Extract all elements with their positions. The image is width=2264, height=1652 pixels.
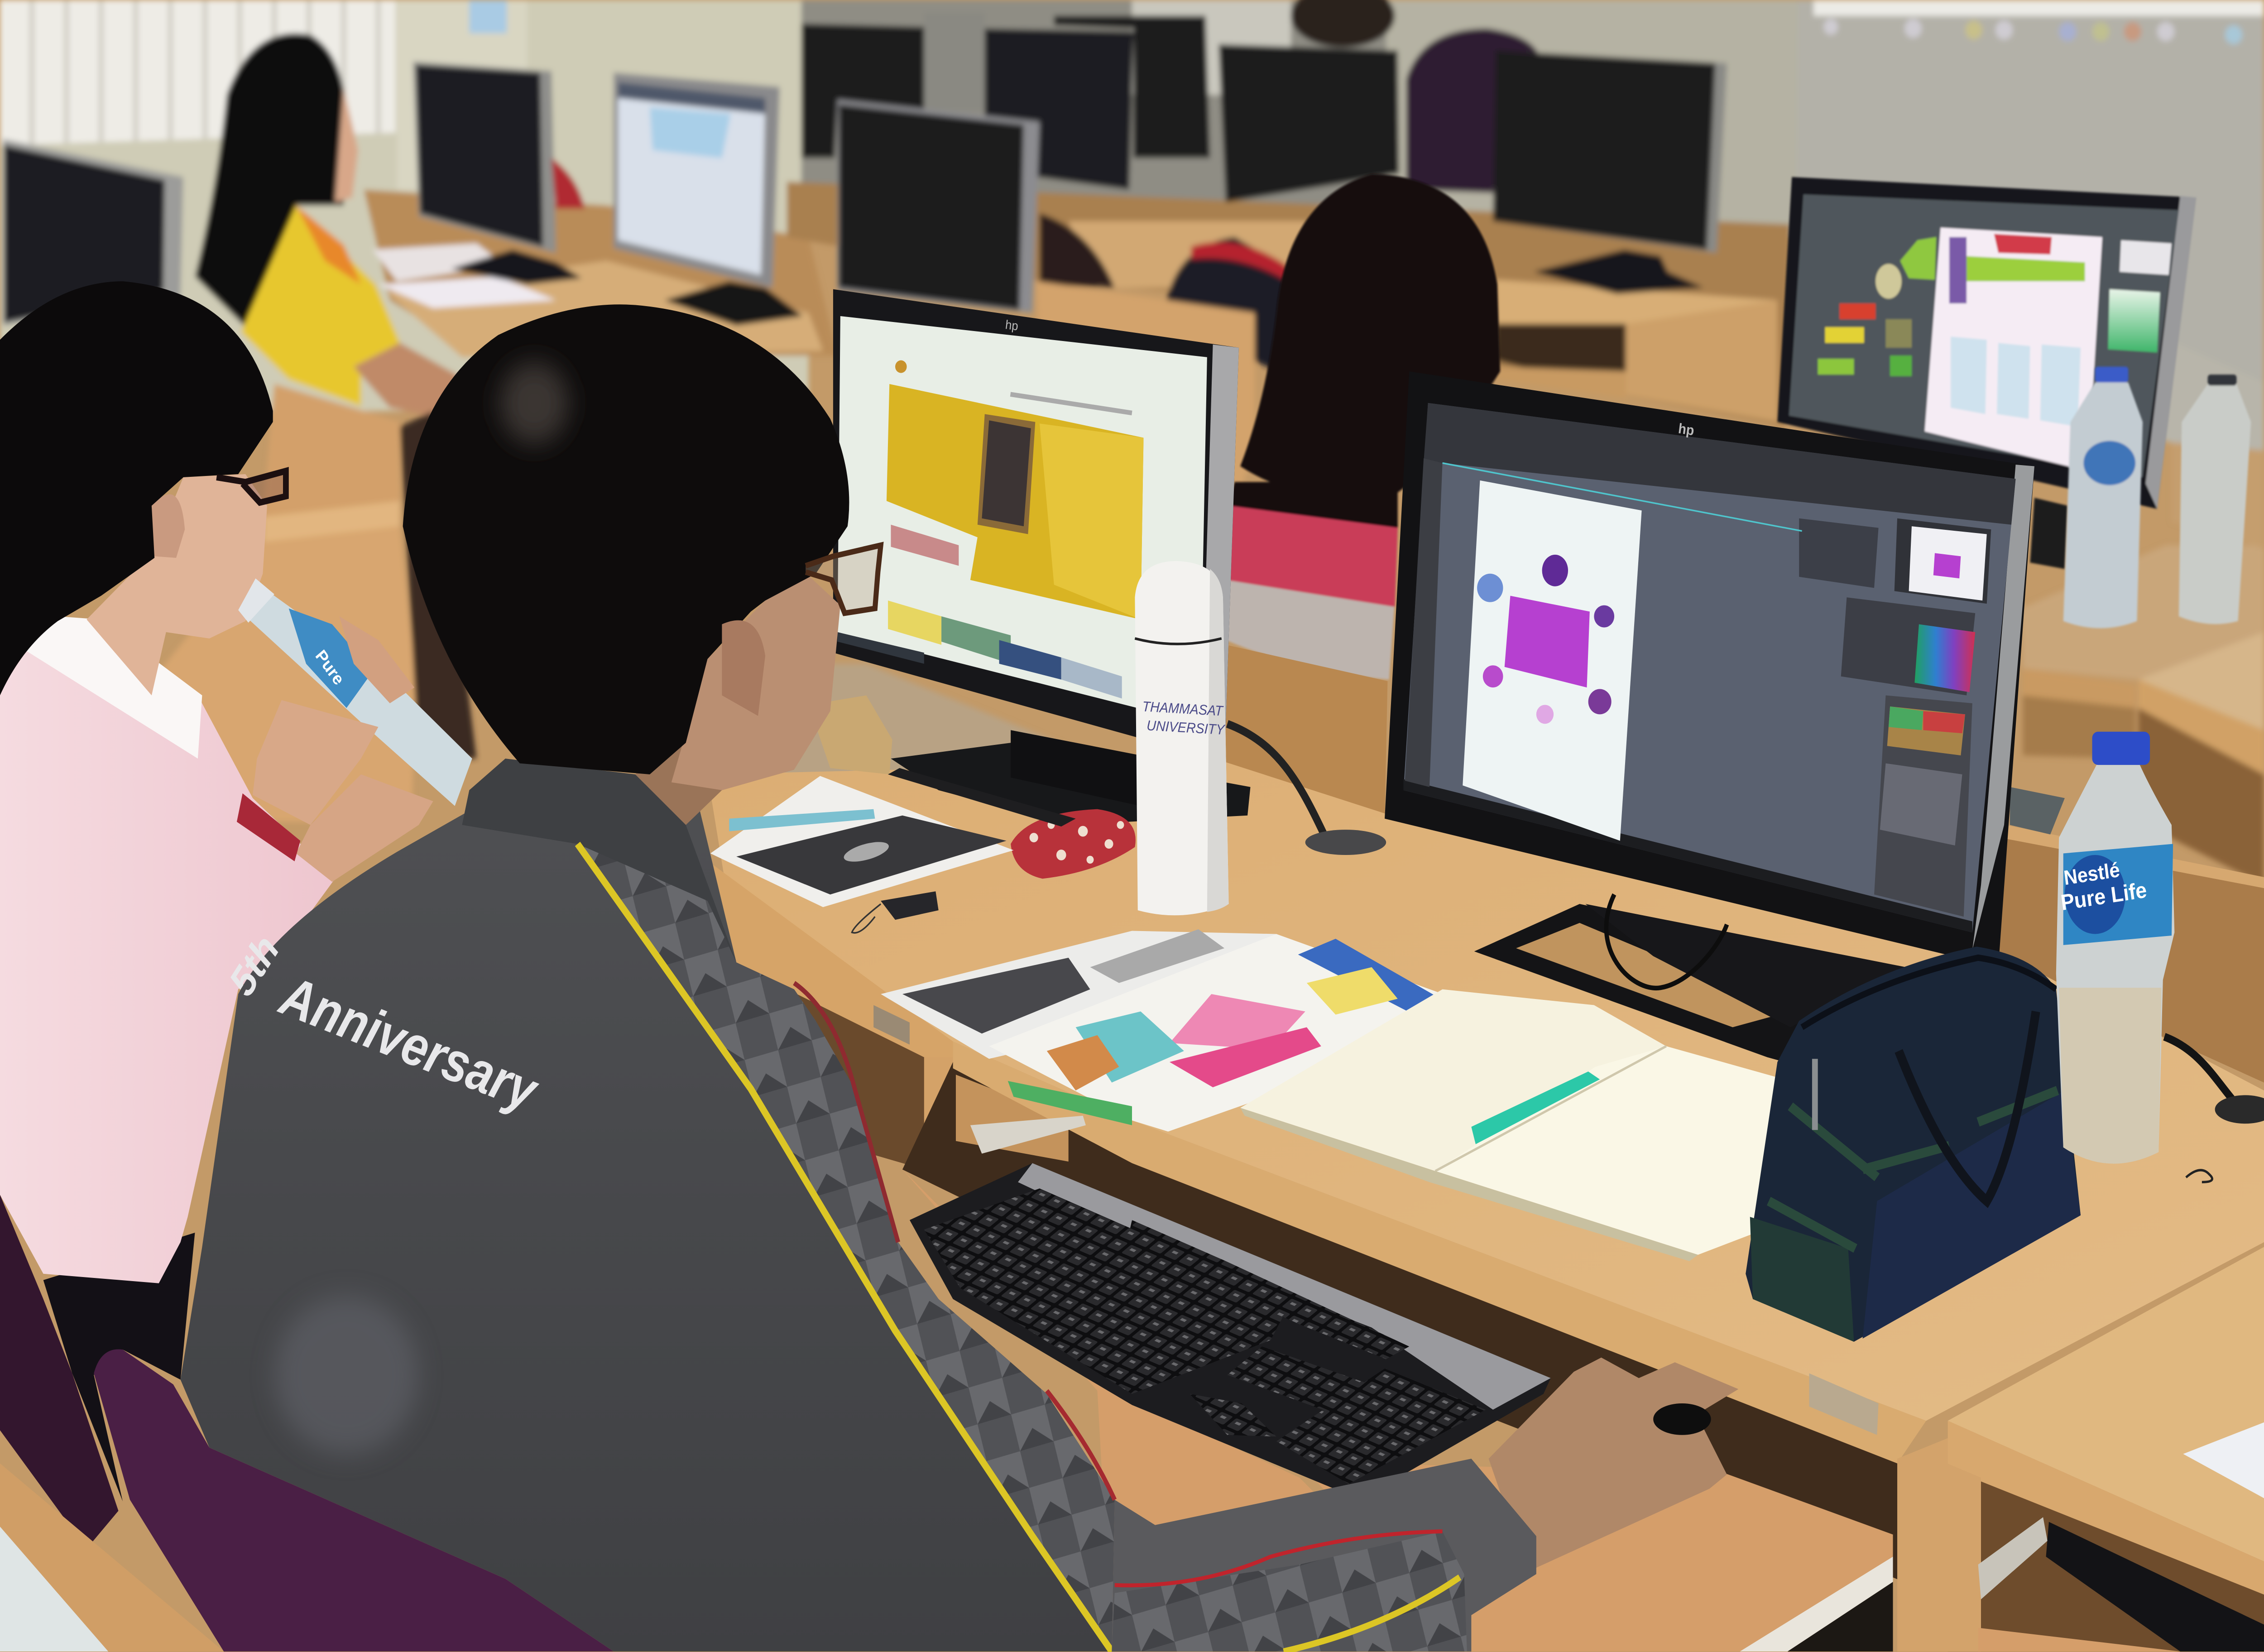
desk structure [710, 863, 1948, 1652]
neck and face [86, 474, 267, 696]
wood divider centre [1037, 281, 1255, 506]
art page [1463, 480, 1642, 841]
hair [1240, 174, 1500, 498]
mouse [1653, 1403, 1711, 1435]
bottom thumbnails blue [999, 640, 1061, 680]
monitor cable [1606, 894, 1727, 988]
watch [237, 793, 300, 861]
bottle b body [2179, 384, 2251, 624]
papers back [373, 243, 505, 281]
items on the desk [710, 696, 1136, 933]
left wall [0, 0, 809, 411]
bottle label text: Nestlé [2063, 859, 2121, 890]
front desk surface [707, 762, 2264, 1421]
main keys [924, 1188, 1292, 1394]
sticker olive [1886, 319, 1912, 348]
bag body [1746, 946, 2081, 1342]
purple chair [1406, 29, 1539, 193]
magenta block [1505, 596, 1590, 687]
portrait center [982, 420, 1031, 526]
left desk top [387, 261, 823, 357]
screen [1789, 194, 2179, 477]
far right desk top [2139, 632, 2264, 730]
neck [635, 696, 794, 825]
rear wall section [801, 0, 1408, 206]
artboard box three [2040, 345, 2081, 427]
bottle label [2063, 844, 2173, 945]
far monitor f [1054, 16, 1210, 158]
grey image [1090, 929, 1224, 983]
hp logo: hp [1005, 317, 1019, 333]
window blinds [0, 0, 396, 145]
transform panel [1799, 519, 1879, 588]
right panel column [1874, 696, 1972, 917]
usb key [881, 891, 939, 920]
artboard [1925, 228, 2102, 471]
underside [1948, 1468, 2264, 1652]
yellow stripe [578, 844, 1112, 1652]
screen [837, 316, 1207, 724]
back monitor c frame [614, 73, 780, 288]
desk leg [1897, 1438, 1948, 1652]
lighter wall section [397, 0, 527, 190]
artboard figure [1949, 237, 1967, 303]
wood partitions behind front desk [1226, 645, 2264, 1083]
fingers top [339, 616, 414, 703]
stand opening [1516, 923, 1790, 1027]
menu line [1010, 392, 1132, 415]
red chair trim [1191, 242, 1295, 284]
thermos shade [1207, 569, 1229, 912]
dark booklet cover [902, 958, 1090, 1033]
floral case dots [1030, 821, 1124, 864]
artboard box one [1951, 336, 1987, 414]
background room [0, 0, 2264, 885]
bottle label text two: Pure Life [2059, 878, 2148, 915]
hair highlight [499, 362, 569, 444]
back monitor a frame [3, 139, 183, 326]
shirt grey band [1226, 569, 1395, 680]
back right under desk [2023, 696, 2135, 759]
front monitor [1385, 371, 2034, 1062]
glasses [806, 545, 881, 613]
wooden edge [0, 1464, 224, 1652]
right panel swatch [2108, 289, 2160, 352]
yellow pill [1307, 967, 1398, 1014]
dark below rail [1788, 1582, 1893, 1652]
woman in yellow hair [195, 33, 346, 327]
toolbar [1424, 403, 2016, 525]
blue banner [1298, 939, 1435, 1011]
far right under desk [2139, 708, 2264, 885]
metal label left [873, 1005, 910, 1045]
white corner [0, 1527, 108, 1652]
lower right desk [1943, 1247, 2264, 1652]
far monitor h stand [1533, 250, 1704, 294]
bottle a body [2063, 383, 2143, 628]
bottle label dark [2065, 855, 2125, 934]
hp logo: hp [1677, 421, 1695, 439]
back monitor b frame [413, 62, 556, 253]
back desk opening [1496, 324, 1626, 395]
bag plaid lower [1750, 1217, 1854, 1342]
woman in yellow arm [354, 343, 465, 419]
far monitor h screen [1493, 51, 1715, 250]
red chair back [1164, 237, 1295, 379]
back center monitor frame [837, 100, 1040, 313]
computer keyboard [910, 1163, 1551, 1489]
sticker leaf [1890, 355, 1912, 376]
forearm red piping [1115, 1532, 1443, 1585]
navigator panel [1895, 519, 1991, 604]
thermos body [1135, 561, 1229, 915]
handbag [1746, 946, 2081, 1342]
bottle lower water [2059, 988, 2162, 1164]
desk edge band [953, 1042, 1926, 1464]
hair [403, 304, 849, 774]
sticker yellow [1825, 327, 1864, 343]
navigator art [1933, 553, 1961, 578]
usb strap [852, 904, 881, 933]
red text block [891, 525, 959, 566]
keyboard tray left [902, 1169, 1473, 1652]
far column [924, 13, 985, 110]
jacket anniversary text: Anniversary [272, 963, 546, 1124]
thermos label: THAMMASAT [1142, 699, 1224, 719]
back right desk surface [2021, 545, 2264, 680]
nav keys [1227, 1346, 1370, 1414]
bottom thumbnails light [1061, 658, 1122, 698]
under desk shadow [902, 1062, 1900, 1580]
forearm [1112, 1459, 1536, 1652]
projected desktop icons [1823, 19, 2242, 44]
second opening wood [956, 1075, 1069, 1162]
back monitor a screen [5, 145, 165, 322]
desk top [1948, 1247, 2264, 1561]
lower right wall [1796, 177, 2264, 474]
back desk top [1496, 280, 1777, 324]
monitor base [2030, 498, 2067, 569]
red chair left side [552, 158, 585, 209]
red piping upper [794, 983, 898, 1242]
bag plaid strap [1769, 1090, 2058, 1249]
artboard red banner [1994, 234, 2052, 255]
bottom yellow tile [888, 600, 941, 645]
purple circle [1483, 665, 1503, 687]
jacket sheen [274, 1296, 419, 1454]
shirt black neckline [1229, 482, 1398, 528]
desk edge left [710, 863, 953, 1062]
foreground chair [0, 1349, 614, 1652]
partition centre [1226, 645, 1387, 822]
blue icon [1477, 574, 1503, 602]
tray wood [1978, 1628, 2180, 1652]
small cable loop [2186, 1170, 2212, 1182]
collar [22, 616, 202, 759]
back monitor b stand [451, 250, 582, 284]
portrait [978, 414, 1035, 534]
projected top bar [1813, 0, 2264, 16]
bezel [1385, 371, 2034, 967]
open notebook with pen [1240, 989, 1779, 1261]
woman in yellow shirt [241, 206, 400, 406]
silver side [2146, 196, 2196, 509]
glasses [216, 471, 286, 503]
monitor bezel [1777, 177, 2196, 509]
back monitor c stand [664, 281, 803, 326]
red chair back far [1040, 213, 1115, 288]
pen on booklet [729, 809, 875, 831]
hand on bottle [253, 700, 378, 825]
floral case [1011, 809, 1136, 879]
yellow banner [887, 384, 1144, 620]
pink strip [1170, 1027, 1321, 1087]
artboard box two [1997, 343, 2030, 419]
teal block [1076, 1011, 1184, 1083]
keyboard case [910, 1163, 1551, 1489]
booklet dark cover [736, 816, 1007, 894]
back monitor b screen [416, 65, 543, 246]
silver edge [1972, 465, 2034, 950]
back right monitor [1777, 177, 2196, 569]
yellow banner highlight [1040, 423, 1144, 620]
stroke panel [1841, 597, 1975, 696]
stand neck [1585, 904, 1906, 1027]
far person [1291, 0, 1395, 48]
brown block [1047, 1035, 1119, 1090]
back monitor c screen [618, 82, 765, 275]
back desk cabinet [1626, 300, 1777, 422]
red piping lower [1047, 1391, 1115, 1500]
forearm yellow stripe [1284, 1577, 1460, 1652]
left desk top [263, 501, 400, 542]
neck [1011, 730, 1141, 806]
center monitor [833, 289, 1386, 855]
thermos lid seam [1135, 639, 1222, 644]
bottle logo: Pure [312, 646, 348, 689]
patterned sleeve [578, 844, 1115, 1652]
keyboard [2046, 1522, 2264, 1652]
hair [0, 281, 273, 696]
wood divider right upper [2172, 442, 2264, 548]
far right desk front [2139, 680, 2264, 774]
keyboard silver band [1018, 1163, 1551, 1410]
sticker cream [1875, 264, 1902, 299]
stand frame [1474, 904, 1863, 1062]
partition right top [2000, 825, 2264, 898]
tools [1405, 458, 1443, 787]
metal bracket [1978, 1517, 2048, 1599]
left wood divider [263, 384, 400, 517]
woman in yellow face [335, 87, 358, 202]
page edge [1240, 1108, 1698, 1261]
pink circle [1536, 705, 1554, 724]
far monitor g [1218, 44, 1399, 202]
guide line [1443, 463, 1802, 531]
bottle a cap [2095, 367, 2128, 383]
notice on wall [469, 0, 507, 33]
silver side [1201, 345, 1239, 762]
mic base [2215, 1095, 2264, 1124]
booklet on desk [710, 776, 1014, 907]
papers mid [378, 277, 556, 308]
character panel [1880, 764, 1962, 845]
left chair [0, 1195, 118, 1549]
bag mesh pocket [1863, 1090, 2081, 1339]
jacket body [181, 782, 1115, 1652]
keyboard tray right [1300, 1462, 1893, 1652]
ear [722, 620, 765, 716]
water bottle [241, 580, 472, 806]
back desk lower [1496, 367, 1626, 398]
wooden glasses case [809, 696, 892, 774]
mic stand [2164, 1037, 2241, 1109]
teal pen [1471, 1071, 1600, 1144]
under sheet [881, 931, 1364, 1059]
bag handle [1899, 1011, 2036, 1201]
tray rail [1740, 1556, 1893, 1652]
right panel thumb [2120, 240, 2172, 275]
seat back [94, 1349, 614, 1652]
light wall patch [1132, 0, 1291, 95]
spine [1435, 1046, 1666, 1171]
back monitor c top bar [618, 82, 765, 114]
bottle label [289, 609, 373, 708]
far monitor e [985, 29, 1133, 190]
hand lower [296, 774, 433, 882]
woman drinking in foreground [0, 281, 472, 1549]
thermos label line two: UNIVERSITY [1146, 718, 1226, 738]
black pen on desk [888, 768, 1076, 826]
screen [1403, 403, 2016, 932]
woman in yellow shoulder accent [296, 206, 361, 284]
purple person icon [1594, 605, 1614, 627]
face [672, 569, 840, 790]
desk leg [1943, 1462, 1981, 1652]
dark person icon [1588, 689, 1612, 714]
colour picker [1914, 624, 1975, 692]
back center monitor screen [839, 104, 1024, 310]
artboard green bar [1965, 256, 2085, 281]
arrow keys [1190, 1394, 1276, 1436]
woman in the middle seen from behind [1226, 174, 1500, 680]
bag zipper [1802, 958, 2056, 1027]
notebook front page [1435, 1046, 1779, 1255]
projection screen [1796, 0, 2264, 383]
bottle b cap [2208, 375, 2236, 386]
center back desk wall [787, 182, 1790, 427]
printed infographic handout [881, 929, 1500, 1132]
ear [152, 494, 185, 558]
shirt [0, 616, 335, 1283]
under desk left opening [736, 951, 953, 1169]
swatches red [1923, 711, 1965, 733]
partition right [1986, 838, 2264, 1083]
shirt red band [1226, 503, 1398, 607]
area behind monitor one [780, 664, 1097, 806]
back desk top left [1069, 221, 1307, 288]
water bottle: Nestle Pure Life [2056, 732, 2264, 1182]
back monitor c image [650, 107, 731, 158]
green bar [1008, 1081, 1132, 1125]
bezel [833, 289, 1239, 762]
dark clothing [43, 1233, 195, 1501]
rear wall right [1386, 0, 1805, 237]
desk front [1948, 1421, 2264, 1594]
metal label [1809, 1373, 1879, 1435]
swatches green [1889, 706, 1923, 730]
bottle body [2056, 765, 2174, 1164]
back right water bottles [2063, 367, 2251, 628]
purple hat icon [1542, 555, 1568, 586]
white sheet [989, 934, 1500, 1132]
number pad [1276, 1369, 1486, 1484]
taskbar [837, 632, 924, 664]
paper [2183, 1422, 2264, 1498]
far monitor d [801, 24, 924, 158]
taskbar [1403, 779, 1972, 932]
navigator thumb [1909, 526, 1987, 600]
bottle cap [2092, 732, 2150, 765]
forearm pattern [1112, 1532, 1467, 1652]
left tray bracket [970, 1116, 1086, 1154]
logo circle [895, 360, 907, 373]
sticker red [1839, 303, 1875, 319]
bottle cap [238, 578, 274, 623]
pink block [1170, 994, 1305, 1049]
mic base [1305, 830, 1386, 855]
cable [1227, 724, 1325, 838]
gap behind right partition [2010, 787, 2065, 835]
swatches [1887, 706, 1965, 755]
far monitor h frame [1493, 51, 1727, 253]
bottle a label [2083, 441, 2135, 485]
stand pad [891, 743, 1250, 825]
left desk leg [924, 1057, 956, 1169]
notebook back page [1240, 989, 1666, 1171]
jacket age text: 5th [221, 927, 288, 1004]
left desk block [162, 526, 416, 822]
thermos: Thammasat University [1135, 561, 1229, 915]
zipper pull [1812, 1059, 1818, 1130]
booklet logo [842, 838, 891, 865]
dark gap by hair [400, 411, 476, 759]
man at computer [181, 304, 1738, 1652]
sticker green [1818, 359, 1854, 375]
back right desk front [2023, 668, 2135, 708]
bottom thumbnails [941, 616, 1011, 664]
dark collar [462, 759, 736, 962]
sticker cactus [1900, 237, 1936, 280]
f keys [1126, 1220, 1409, 1359]
left back desk panel [364, 190, 837, 355]
hand on mouse [1489, 1358, 1738, 1568]
